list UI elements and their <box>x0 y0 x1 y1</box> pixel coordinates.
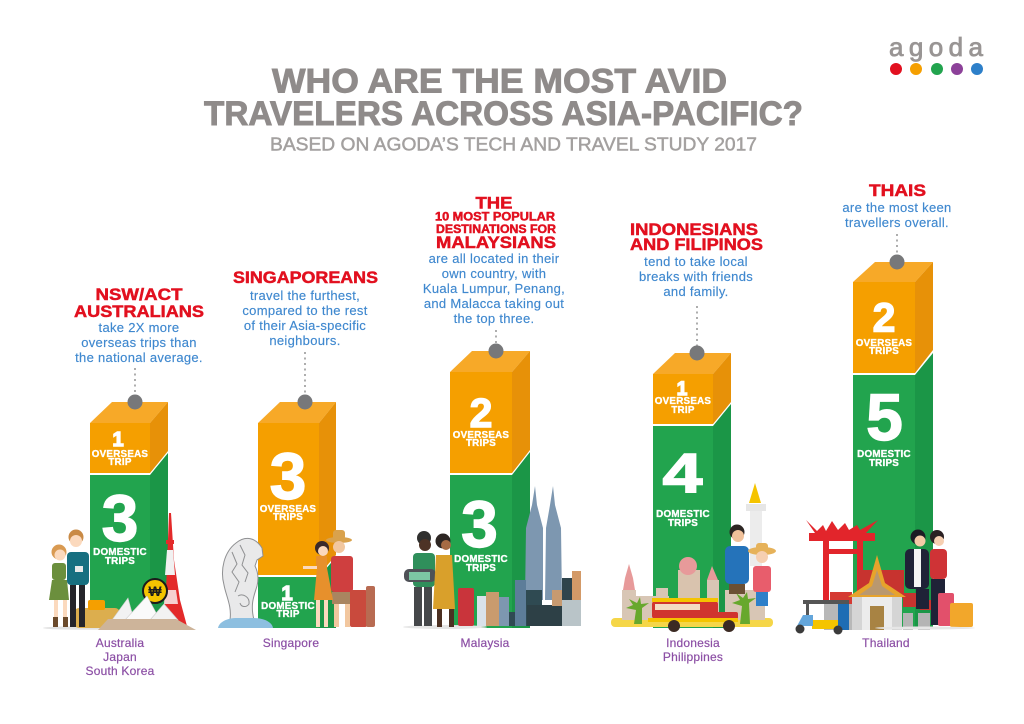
callout: Malaysians: and Malacca taking out <box>424 296 564 311</box>
country label: Singapore: Singapore <box>263 636 319 650</box>
callout: Singaporeans: travel the furthest, <box>250 288 360 303</box>
bar: Australia Japan South Korea: OVERSEAS <box>92 449 148 460</box>
bar: Indonesia Philippines <box>653 346 731 628</box>
bar: Australia Japan South Korea: TRIPS <box>105 556 135 567</box>
callout: Australians <box>74 285 204 396</box>
bar: Australia Japan South Korea: DOMESTIC <box>93 547 147 558</box>
man <box>730 524 744 540</box>
bar: Thailand: OVERSEAS <box>856 338 912 349</box>
bar: Malaysia: DOMESTIC <box>454 554 508 565</box>
bar: Singapore: TRIP <box>276 609 300 620</box>
title: WHO ARE THE MOST AVID <box>272 62 727 100</box>
man <box>326 537 352 543</box>
illustration: Thailand scene <box>796 520 975 634</box>
callout: Singaporeans: of their Asia-specific <box>244 318 366 333</box>
woman <box>436 534 450 548</box>
bar: Indonesia Philippines: TRIP <box>671 405 695 416</box>
woman <box>315 541 329 555</box>
callout: Indonesians and Filipinos: AND FILIPINOS <box>630 235 763 254</box>
bar: Singapore: 1 <box>281 583 293 605</box>
bar: Australia Japan South Korea <box>90 394 168 628</box>
callout: Malaysians: own country, with <box>442 266 546 281</box>
jeepney <box>648 598 738 632</box>
illustration: Indonesia Philippines scene <box>611 483 776 632</box>
bar: Indonesia Philippines: 1 <box>677 379 688 400</box>
bar: Malaysia: OVERSEAS <box>453 430 509 441</box>
Tokyo tower <box>163 513 187 626</box>
callout: Singaporeans <box>233 268 378 396</box>
bar: Thailand: 2 <box>873 294 895 340</box>
callout: Malaysians: the top three. <box>454 311 534 326</box>
bar: Indonesia Philippines: DOMESTIC <box>656 509 710 520</box>
bar: Thailand: TRIPS <box>869 458 899 469</box>
temple <box>830 592 852 604</box>
city blocks <box>477 596 486 626</box>
opera house <box>112 598 134 620</box>
country label: Indonesia Philippines: Indonesia <box>666 636 720 650</box>
luggage <box>938 593 954 626</box>
callout: Australians: take 2X more <box>99 320 179 335</box>
country label: Thailand: Thailand <box>862 636 910 650</box>
country label: Australia Japan South Korea: Australia <box>96 636 144 650</box>
bar: Indonesia Philippines: TRIPS <box>668 518 698 529</box>
title <box>204 62 803 133</box>
bar: Singapore: OVERSEAS <box>260 504 316 515</box>
country label: Australia Japan South Korea: Japan <box>103 650 137 664</box>
country label: Australia Japan South Korea: South Korea <box>86 664 155 678</box>
man <box>68 530 84 544</box>
giant swing <box>806 520 878 541</box>
callout: Indonesians and Filipinos: tend to take local <box>644 254 748 269</box>
callout: Malaysians: MALAYSIANS <box>436 233 556 252</box>
callout: Indonesians and Filipinos: breaks with friends <box>639 269 753 284</box>
callout: Malaysians: Kuala Lumpur, Penang, <box>423 281 565 296</box>
callout: Malaysians <box>423 194 565 346</box>
callout: Malaysians: DESTINATIONS FOR <box>436 222 556 236</box>
bar: Thailand: TRIPS <box>869 346 899 357</box>
bar: Malaysia: TRIPS <box>466 438 496 449</box>
callout: Singaporeans: compared to the rest <box>242 303 368 318</box>
bar: Singapore <box>258 394 336 628</box>
couple <box>910 530 926 544</box>
country label: Indonesia Philippines <box>663 636 723 664</box>
callout: Indonesians and Filipinos: and family. <box>663 284 729 299</box>
callout: Singaporeans: SINGAPOREANS <box>233 268 378 287</box>
Petronas towers <box>525 486 543 600</box>
bar: Australia Japan South Korea: 1 <box>112 429 124 451</box>
title: TRAVELERS ACROSS ASIA-PACIFIC? <box>204 95 803 133</box>
callout: Thais: are the most keen <box>842 200 952 215</box>
bar: Malaysia <box>450 344 530 628</box>
bar: Indonesia Philippines: OVERSEAS <box>655 396 711 407</box>
callout: Malaysians: are all located in their <box>429 251 560 266</box>
illustration: Singapore scene <box>218 530 375 628</box>
callout: Thais: travellers overall. <box>845 215 949 230</box>
callout: Australians: NSW/ACT <box>96 285 183 304</box>
callout: Thais: THAIS <box>869 181 926 200</box>
won coin <box>143 579 167 603</box>
bar: Thailand: DOMESTIC <box>857 449 911 460</box>
callout: Indonesians and Filipinos: INDONESIANS <box>630 220 758 239</box>
bar: Malaysia: 3 <box>461 487 498 561</box>
logo: agoda <box>889 32 984 75</box>
bar: Malaysia: TRIPS <box>466 563 496 574</box>
callout: Australians: the national average. <box>75 350 203 365</box>
bar: Malaysia: 2 <box>470 390 492 436</box>
bar: Singapore: 3 <box>270 439 306 513</box>
woman <box>52 544 66 560</box>
illustration: Australia Japan Korea scene: ₩ <box>148 583 162 599</box>
bar: Australia Japan South Korea: TRIP <box>108 457 132 468</box>
tuk tuk <box>803 600 849 604</box>
country label: Indonesia Philippines: Philippines <box>663 650 723 664</box>
bar: Singapore: TRIPS <box>273 512 303 523</box>
illustration: Malaysia scene <box>403 486 581 629</box>
logo: agoda: agoda <box>889 32 984 62</box>
callout: Indonesians and Filipinos <box>630 220 763 347</box>
man <box>417 531 431 545</box>
woman <box>748 547 776 555</box>
suitcase <box>458 588 474 626</box>
palms <box>626 592 756 624</box>
country label: Australia Japan South Korea <box>86 636 155 678</box>
monument <box>749 483 761 503</box>
country label: Malaysia: Malaysia <box>461 636 510 650</box>
callout: Singaporeans: neighbours. <box>269 333 341 348</box>
bar: Indonesia Philippines: 4 <box>662 442 702 504</box>
bar: Thailand: 5 <box>866 380 903 454</box>
churches <box>622 590 636 620</box>
callout: Australians: AUSTRALIANS <box>74 302 204 321</box>
illustration: Australia Japan Korea scene <box>43 513 196 630</box>
bar: Singapore: DOMESTIC <box>261 601 315 612</box>
bar: Australia Japan South Korea: 3 <box>102 481 138 555</box>
callout: Australians: overseas trips than <box>81 335 197 350</box>
callout: Thais <box>842 181 952 255</box>
subtitle: BASED ON AGODA’S TECH AND TRAVEL STUDY 2017 <box>270 134 757 154</box>
callout: Malaysians: THE <box>476 194 512 212</box>
callout: Malaysians: 10 MOST POPULAR <box>435 210 555 224</box>
bar: Thailand <box>853 254 933 628</box>
